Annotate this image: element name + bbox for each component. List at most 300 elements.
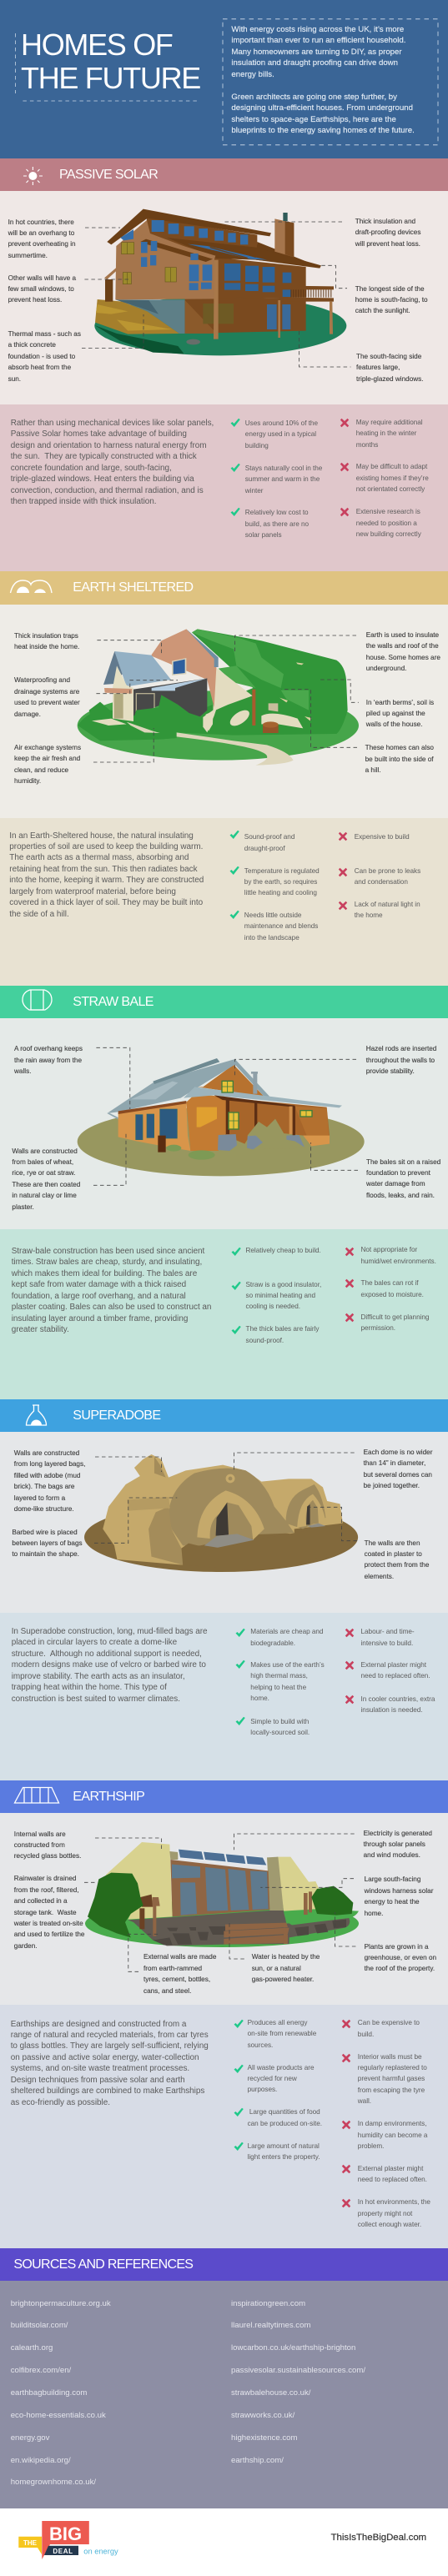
icon: cross [340,507,349,517]
callout: Barbed wire is placed [12,1529,78,1536]
pro: Straw is a good insulator, [245,1281,321,1288]
callout: protect them from the [365,1561,429,1569]
con: months [356,441,378,449]
source column 1: brightonpermaculture.org.uk [11,2298,111,2308]
icon: bale [0,986,67,1018]
callout: In hot countries, there [8,218,74,225]
callout: In ‘earth berms’, soil is [366,699,434,706]
callout [14,1873,84,1951]
footer [0,2508,448,2576]
source column 1: earthbagbuilding.com [11,2388,87,2398]
source column 1: eco-home-essentials.co.uk [11,2411,106,2420]
callout [143,1951,216,1996]
band: earthship [0,1780,448,1813]
con: and condensation [355,878,408,886]
panel: earth sheltered description [0,818,448,986]
pro: Relatively low cost to [245,509,309,516]
pro: sources. [248,2041,273,2049]
pro: by the earth, so requires [244,878,317,886]
icon: check [230,911,239,919]
con: not orientated correctly [356,485,425,493]
source column 2: highexistence.com [231,2433,297,2443]
pro [250,1626,323,1649]
callout: A roof overhang keeps [14,1045,83,1052]
icon: check [234,2107,244,2117]
con [358,2017,420,2040]
icon: cross [341,2053,351,2063]
pro [245,1323,319,1346]
con: prevent harmful gases [358,2075,425,2082]
pro: winter [245,487,263,495]
source column 2: llaurel.realtytimes.com [231,2321,310,2330]
icon: check [230,1247,240,1257]
panel: sources list [0,2281,448,2508]
callout [14,1043,83,1077]
body text: The earth acts as a thermal mass, absorbing and [9,853,189,862]
callout: absorb heat from the [8,364,71,371]
con: new building correctly [356,530,421,538]
callout: Other walls will have a [8,274,76,282]
body text: trapping heat within the home. This type of [12,1683,167,1692]
illustration: passive solar house [82,208,350,367]
pro: solar panels [245,531,282,539]
callout: plaster. [12,1203,34,1211]
source column 1: colfibrex.com/en/ [11,2366,71,2375]
body text: design and orientation to harness natural energy from [11,441,207,450]
heading: SUPERADOBE [73,1409,160,1423]
body text: Rather than using mechanical devices like solar panels, [11,419,214,428]
body text: In an Earth-Sheltered house, the natural insulating [9,831,194,841]
callout: from earth-rammed [143,1965,202,1972]
source column 1: en.wikipedia.org/ [11,2455,71,2465]
callout: filled with adobe (mud [14,1472,80,1479]
pro [250,1716,310,1738]
heading: EARTHSHIP [73,1790,144,1804]
callout: will be an overhang to [8,229,74,237]
icon: cross [340,419,349,427]
callout: Rainwater is drained [14,1875,76,1882]
pro: sound-proof. [245,1337,284,1344]
con: existing homes if they’re [356,475,429,482]
title: THE FUTURE [21,61,200,95]
body text: range of natural and recycled materials, from car tyres [11,2031,209,2040]
body text: modern designs make use of velcro or barbed wire to [12,1660,206,1670]
pro: build, as there are no [245,520,309,528]
callout: recycled glass bottles. [14,1852,81,1860]
callout: will prevent heat loss. [355,240,420,248]
logo: on energy [83,2547,118,2555]
callout: foundation to prevent [366,1169,430,1177]
callout: Earth is used to insulate [366,631,439,639]
con: Expensive to build [355,833,410,841]
callout: than 14” in diameter, [364,1459,425,1467]
intro text: Many homeowners are turning to DIY, as proper [231,48,402,57]
pro: high thermal mass, [250,1672,308,1680]
panel: straw bale description [0,1229,448,1399]
callout [365,699,434,728]
body text: construction is best suited to warmer climates. [12,1695,180,1704]
pro: Sound-proof and [244,833,294,841]
source column 1 [11,2281,219,2508]
pro: Materials are cheap and [250,1628,323,1635]
pro: little heating and cooling [244,889,317,896]
con: humidity can become a [358,2132,427,2139]
con [360,1660,430,1682]
callout: used to prevent water [14,699,80,706]
body text: In Superadobe construction, long, mud-filled bags are [12,1627,208,1636]
callout: Air exchange systems [14,744,81,751]
callout: energy to heat the [365,1898,420,1906]
icon: cross [344,1628,354,1638]
source column 2: strawworks.co.uk/ [231,2411,294,2420]
source column 2: passivesolar.sustainablesources.com/ [231,2366,365,2375]
website: ThisIsTheBigDeal.com [331,2533,426,2543]
callout: few small windows, to [8,285,74,293]
source column 2: earthship.com/ [231,2455,284,2465]
callout: catch the sunlight. [355,307,410,314]
callout: piled up against the [366,710,425,717]
pro: Makes use of the earth’s [250,1661,325,1669]
callout: Each dome is no wider [364,1449,432,1456]
pro: recycled for new [248,2075,297,2082]
icon: check [235,1716,245,1726]
callout: floods, leaks, and rain. [366,1192,435,1199]
callout: Internal walls are [14,1830,66,1838]
pro: cooling is needed. [245,1303,300,1310]
pro [248,2141,320,2162]
con: property might not [358,2210,412,2217]
callout: brick). The bags are [14,1483,74,1490]
icon: cross [338,901,348,911]
callout: rice, rye or oat straw. [12,1169,75,1177]
body text: systems, and on-site waste treatment processes. [11,2064,189,2073]
callout: tyres, cement, bottles, [143,1976,210,1983]
callout: house. Some homes are [366,654,440,661]
callout [364,1447,432,1492]
band: superadobe [0,1399,448,1432]
illustration: earth sheltered house [77,629,359,766]
con [340,462,429,493]
pro [230,911,319,942]
callout [12,1527,83,1560]
callout: walls. [14,1067,31,1075]
callout: the walls and roof of the [366,642,439,650]
source column 1: builditsolar.com/ [11,2321,68,2330]
callout: greenhouse, or even on [365,1954,436,1961]
con [360,1278,424,1300]
con [355,866,420,887]
con: Labour- and time- [360,1628,415,1635]
con [360,1244,436,1267]
pro: The thick bales are fairly [245,1325,319,1333]
con [360,1694,435,1716]
intro text: important than ever to run an efficient household. [231,36,405,45]
con: the home [355,911,383,919]
pro [230,464,322,495]
callout: features large, [356,364,400,371]
callout: humidity. [14,777,41,785]
callout: layered to form a [14,1494,65,1502]
callout [14,1829,81,1862]
body text: kept safe from water damage with a thick raised [12,1280,186,1289]
body text: as eco-friendly as possible. [11,2098,110,2107]
con: intensive to build. [360,1640,413,1647]
icon: cross [344,1660,354,1670]
callout: dome-like structure. [14,1505,74,1513]
con: insulation is needed. [360,1706,423,1714]
body text: covered in a thick layer of soil. They may be built into [9,898,203,907]
body text [12,1246,211,1336]
intro text: insulation and draught proofing can drive down [231,58,398,68]
pro [248,2017,316,2051]
callout: Thermal mass - such as [8,330,81,338]
callout: prevent heat loss. [8,296,62,304]
source column 2: strawbalehouse.co.uk/ [231,2388,310,2398]
pro: Temperature is regulated [244,867,320,875]
callout [365,1874,433,1919]
callout: draft-proofing devices [355,228,420,236]
pro: Simple to build with [250,1718,309,1725]
icon: check [230,831,239,839]
callout: a thick concrete [8,341,56,349]
intro text: blueprints to the energy saving homes of the future. [231,126,415,135]
callout [365,1941,436,1975]
pro: Large quantities of food [249,2108,320,2116]
callout: drainage systems are [14,688,79,695]
callout: be built into the side of [365,756,434,763]
callout: provide stability. [366,1067,415,1075]
title dashed frame [15,33,197,102]
con: Difficult to get planning [360,1313,429,1321]
con: The bales can rot if [360,1279,419,1287]
source column 2: inspirationgreen.com [231,2298,305,2308]
icon: check [230,419,240,427]
callout: These homes can also [365,744,434,751]
body text: improve stability. The earth acts as an insulator, [12,1672,185,1681]
callout: triple-glazed windows. [356,375,424,383]
con [340,419,423,449]
pro: on-site from renewable [248,2030,316,2037]
callout: a hill. [365,766,381,774]
source column 2 [231,2281,440,2508]
callout: but several domes can [364,1471,432,1479]
callout: and wind modules. [364,1851,420,1859]
panel: superadobe illustration [0,1432,448,1613]
body text: structure. Although no additional support is needed, [12,1650,202,1659]
logo [0,2508,133,2576]
source column 1: homegrownhome.co.uk/ [11,2478,96,2487]
pro: energy used in a typical [245,430,316,438]
pro [245,1245,321,1257]
illustration: straw bale house [0,1018,448,1229]
band: passive solar [0,158,448,191]
title: HOMES OF [21,28,173,62]
callout: coated in plaster to [365,1550,422,1558]
pro: locally-sourced soil. [250,1729,310,1736]
con: In hot environments, the [358,2198,430,2206]
con: External plaster might [358,2165,423,2172]
band: straw bale [0,986,448,1018]
con: permission. [360,1324,395,1332]
intro text: designing ultra-efficient houses. From underground [231,103,413,113]
callout [14,1448,85,1515]
con [355,899,420,921]
con: exposed to moisture. [360,1291,424,1298]
pro: Produces all energy [248,2019,307,2026]
callout [355,285,428,314]
intro text [231,25,415,135]
pro [230,866,320,896]
body text: to glass bottles. They are largely self-sufficient, relying [11,2041,209,2051]
icon: cross [341,2120,351,2130]
header panel [0,0,448,158]
callout: Water is heated by the [252,1953,320,1961]
con: problem. [358,2142,384,2150]
panel: earthship description [0,2005,448,2248]
heading: STRAW BALE [73,995,154,1009]
callout [14,632,79,650]
pro: helping to heat the [250,1684,306,1691]
callout [8,330,81,383]
callout [8,274,77,304]
pro: so minimal heating and [245,1292,315,1299]
pro: All waste products are [248,2064,314,2071]
body text: sheltered buildings are combined to make Earthships [11,2086,204,2096]
body text: properties of soil are used to keep the building warm. [9,842,203,851]
callout: Walls are constructed [12,1147,78,1155]
title [21,28,200,95]
icon: sun [23,167,43,185]
body text: retaining heat from the sun. This then radiates back [9,865,198,874]
callout: foundation - is used to [8,353,75,360]
pro [250,1660,325,1705]
pro: can be produced on-site. [248,2120,322,2127]
con: Extensive research is [356,508,420,515]
callout: home. [365,1910,383,1917]
callout: from the roof, filtered, [14,1886,79,1894]
body text: foundation, a large roof overhang, and a natural [12,1292,186,1301]
body text: into the home, keeping it warm. They are constructed [9,876,204,885]
body text: triple-glazed windows. Heat enters the building via [11,475,194,484]
panel: passive solar illustration [0,191,448,404]
pro: biodegradable. [250,1640,295,1647]
callout: Large south-facing [365,1876,420,1883]
icon: cross [340,462,349,472]
callout [364,1828,432,1861]
callout: and collected in a [14,1897,68,1905]
callout: water damage from [366,1180,425,1188]
callout: through solar panels [364,1840,425,1848]
body text: Earthships are designed and constructed from a [11,2020,186,2029]
callout: to maintain the shape. [12,1550,79,1558]
callout: sun. [8,375,21,383]
callout: Walls are constructed [14,1449,79,1457]
callout: Plants are grown in a [365,1943,429,1951]
icon: check [235,1660,245,1670]
con [358,2118,427,2152]
callout: The walls are then [365,1539,420,1547]
icon: check [234,2019,244,2029]
body text [12,1626,208,1705]
body text: the side of a hill. [9,910,69,919]
body text [10,419,214,506]
pro [230,507,309,539]
con: Interior walls must be [358,2053,422,2061]
callout: The bales sit on a raised [366,1158,440,1166]
panel: straw bale illustration [0,1018,448,1229]
pro: building [245,442,269,449]
callout: in natural clay or lime [12,1192,77,1199]
pro [248,2062,314,2096]
con: Lack of natural light in [355,901,420,908]
illustration: earthship [0,1813,448,2005]
callout [14,676,80,718]
body text: placed in circular layers to create a dome-like [12,1638,177,1647]
con [340,507,421,538]
callout: Thick insulation traps [14,632,78,640]
source column 1: energy.gov [11,2433,49,2443]
callout: and used to fertilize the [14,1931,84,1938]
callout: gas-powered heater. [252,1976,314,1983]
con: heating in the winter [356,429,416,437]
icon: cross [338,831,348,841]
heading: SOURCES AND REFERENCES [13,2257,193,2272]
callout: Hazel rods are inserted [366,1045,436,1052]
body text: insulating layer around a timber frame, providing [12,1314,188,1323]
callout: walls of the house. [366,721,423,728]
body text: convection, conduction, and thermal radiation, and is [11,486,204,495]
callout: The south-facing side [356,353,421,360]
source column 2: lowcarbon.co.uk/earthship-brighton [231,2343,355,2353]
con: In damp environments, [358,2120,426,2127]
callout: prevent overheating in [8,240,76,248]
body text [9,831,204,919]
con [358,2163,427,2186]
callout: cans, and steel. [143,1987,191,1995]
pro: maintenance and blends [244,922,318,930]
body text [11,2019,209,2108]
intro text: shelters to space-age Earthships, here are the [231,115,396,123]
pro: draught-proof [244,845,285,852]
body text: Passive Solar homes take advantage of building [11,429,187,439]
callout: the rain away from the [14,1057,82,1064]
callout: from bales of wheat, [12,1158,73,1166]
pro: Large amount of natural [248,2142,320,2150]
con: need to replaced often. [360,1672,430,1680]
icon: check [234,2142,244,2152]
body text: Design techniques from passive solar and earth [11,2076,185,2085]
icon: cross [338,867,348,877]
pro: Relatively cheap to build. [245,1247,321,1254]
body text: concrete foundation and large, south-facing, [11,464,172,473]
con [360,1626,415,1649]
callout: The longest side of the [355,285,425,292]
panel: superadobe description [0,1613,448,1780]
callout [365,631,440,672]
illustration: superadobe domes [0,1432,448,1613]
callout: Thick insulation and [355,218,415,225]
band: sources and references [0,2248,448,2281]
callout: External walls are made [143,1953,216,1961]
body text: greater stability. [12,1325,69,1334]
callout [365,744,434,774]
pro: purposes. [248,2086,277,2093]
callout [365,1538,429,1582]
callout: damage. [14,711,41,718]
callout [12,1146,80,1213]
pro: Uses around 10% of the [245,419,318,427]
callout: underground. [366,665,406,672]
